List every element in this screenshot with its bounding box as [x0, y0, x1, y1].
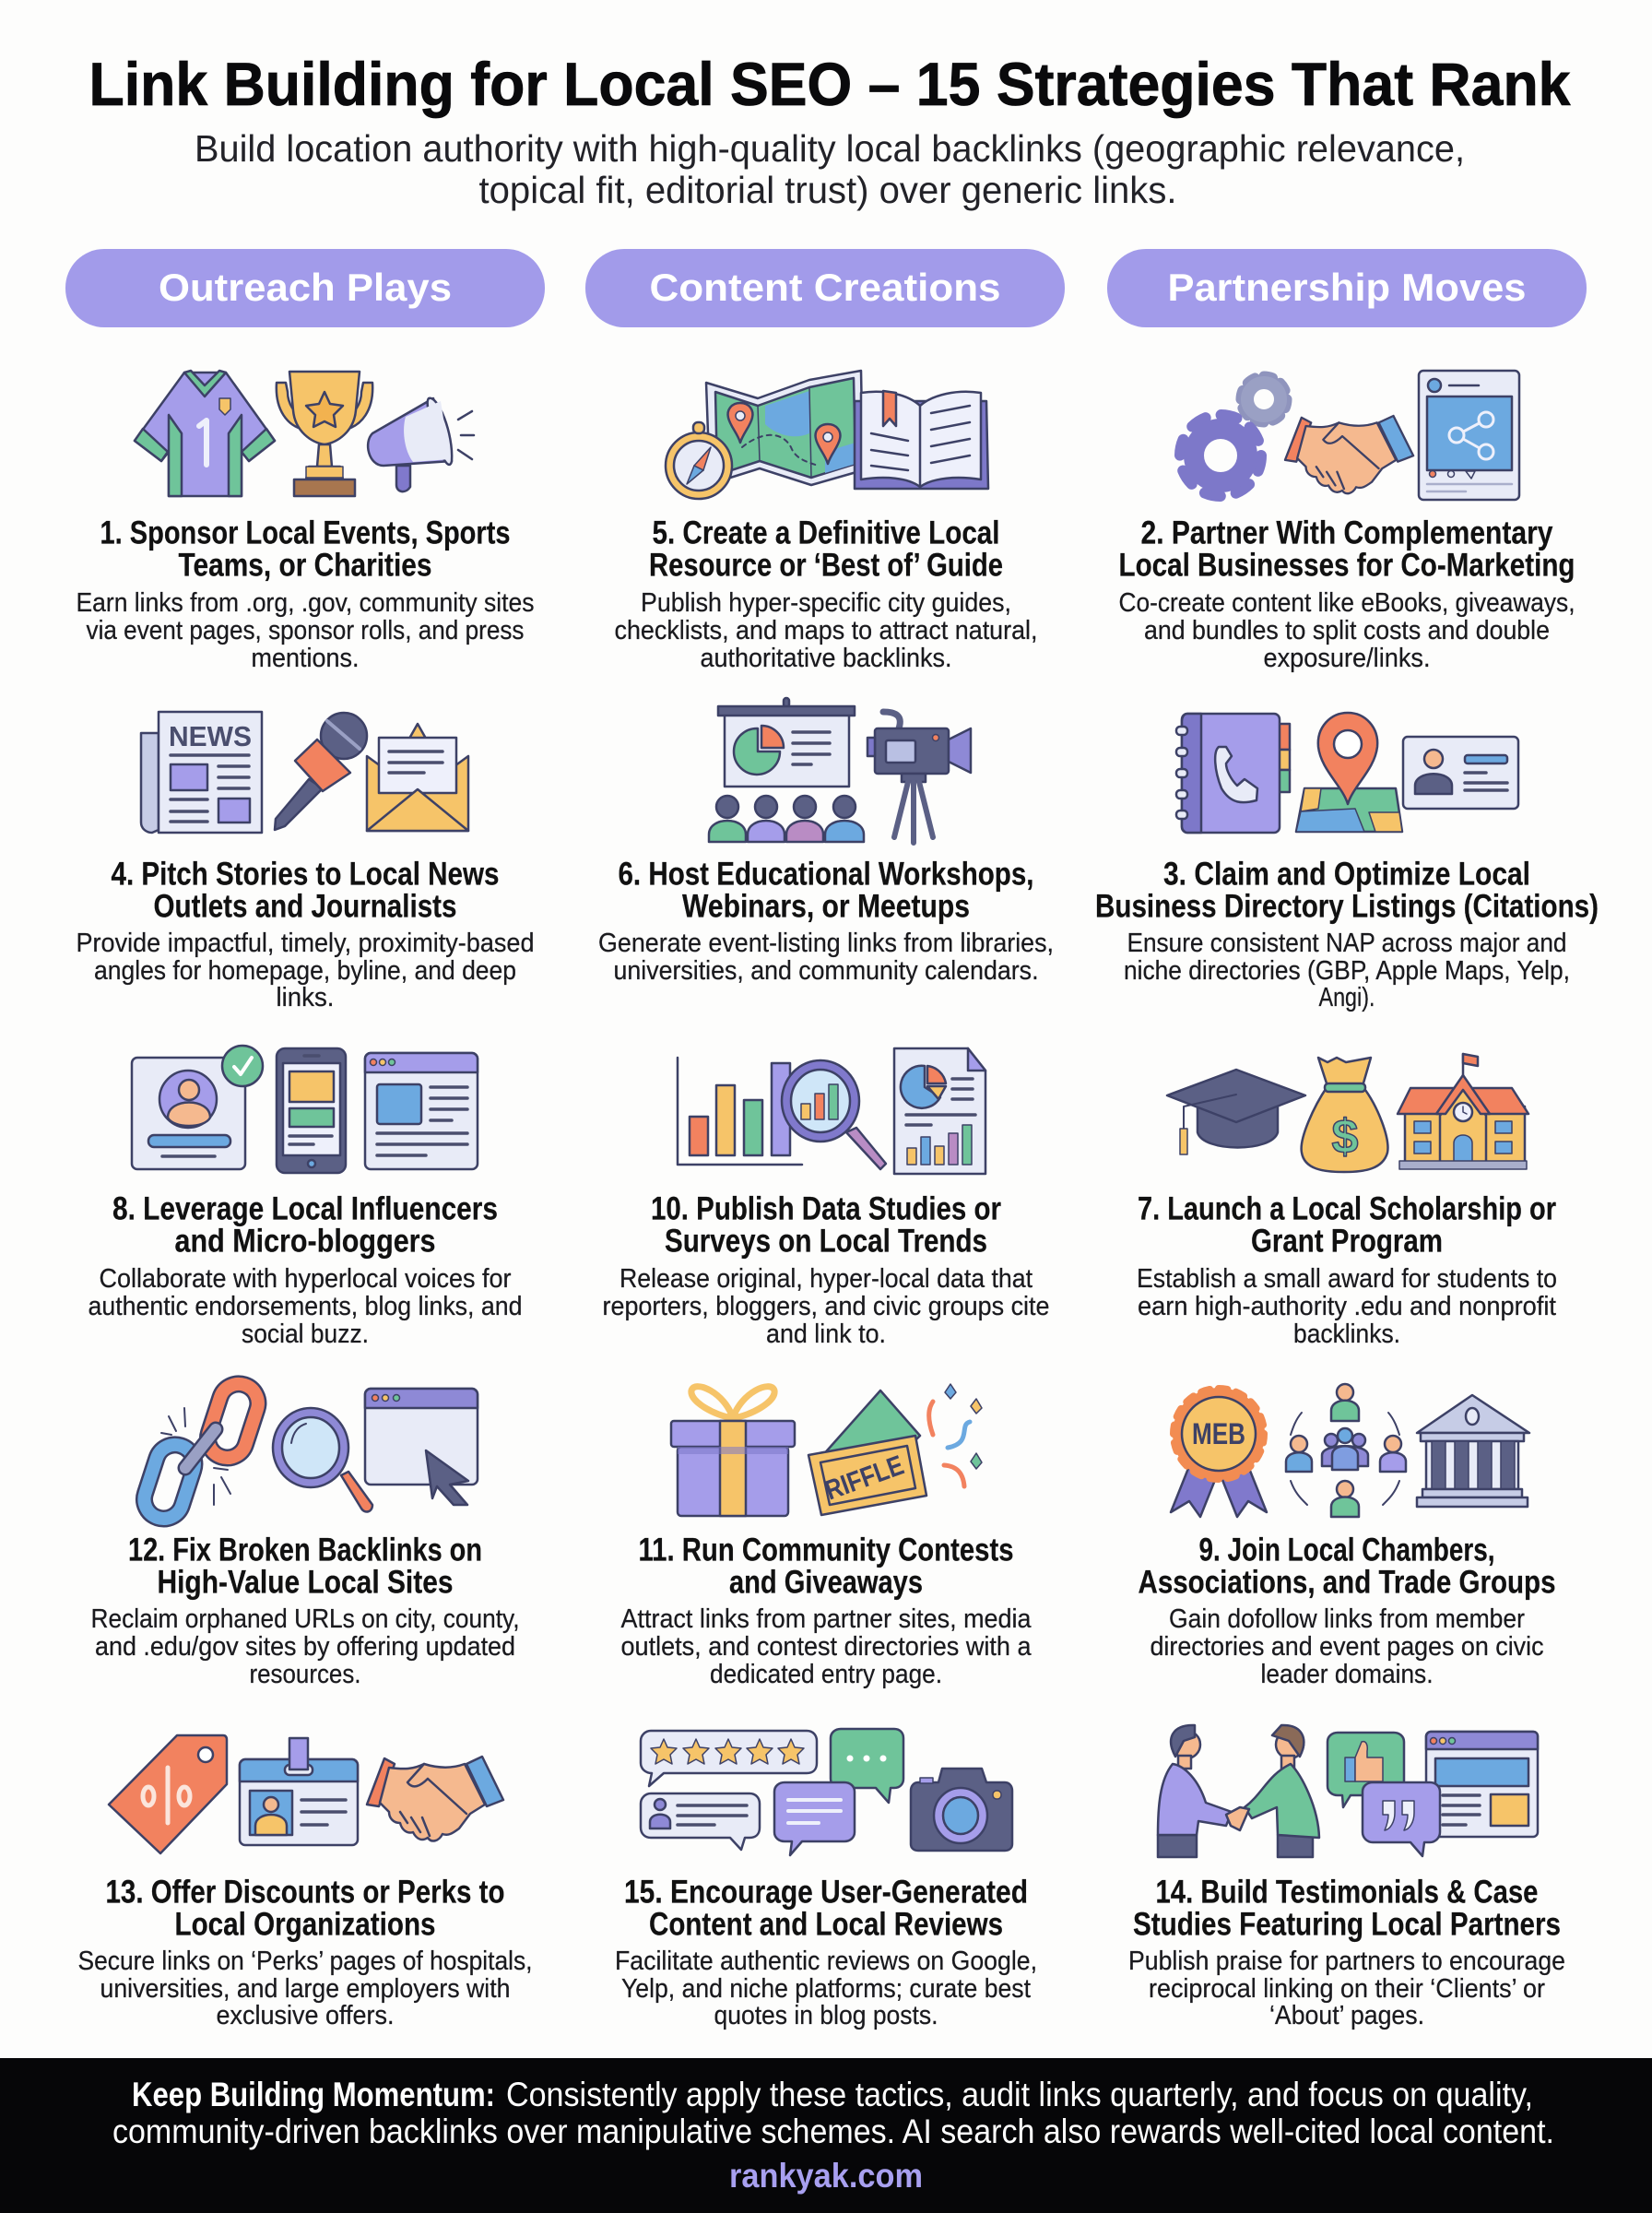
card 5: definitive local guide [614, 515, 1038, 673]
icon: reviews, speech bubbles, camera [641, 1729, 1012, 1855]
card 7: scholarship [1137, 1191, 1557, 1349]
heading: Grant Program [1251, 1223, 1443, 1260]
description: leader domains. [1261, 1660, 1433, 1689]
icon: presentation board, audience, video camera [709, 698, 971, 843]
title: Link Building for Local SEO – 15 Strategies That Rank [88, 50, 1571, 118]
icon: profile card, smartphone, browser window [132, 1046, 478, 1173]
description [615, 1947, 1037, 2030]
description: dedicated entry page. [710, 1660, 942, 1689]
description: angles for homepage, byline, and deep [94, 956, 516, 986]
column header: Partnership Moves [1107, 249, 1587, 327]
icon: medal, member network, bank building: MEB [1192, 1417, 1245, 1450]
card 2: partner with local businesses [1119, 515, 1575, 673]
description: ‘About’ pages. [1269, 2001, 1424, 2030]
description: Co-create content like eBooks, giveaways, [1119, 588, 1575, 618]
card 6: workshops [598, 856, 1054, 986]
footer message: Keep Building Momentum: [132, 2076, 495, 2113]
description: Facilitate authentic reviews on Google, [615, 1947, 1037, 1976]
heading: 4. Pitch Stories to Local News [111, 856, 500, 893]
heading: 12. Fix Broken Backlinks on [128, 1533, 482, 1568]
heading: 1. Sponsor Local Events, Sports [100, 515, 511, 551]
description: universities, and community calendars. [614, 956, 1038, 986]
icon: medal, member network, bank building [1171, 1384, 1529, 1517]
heading: 5. Create a Definitive Local [653, 515, 999, 551]
description: resources. [249, 1660, 361, 1689]
heading: 14. Build Testimonials & Case [1156, 1874, 1538, 1911]
description: checklists, and maps to attract natural, [614, 616, 1038, 645]
column header: Content Creations: Content Creations [649, 266, 1001, 309]
heading: Content and Local Reviews [649, 1907, 1003, 1942]
description: mentions. [251, 644, 360, 673]
description [90, 1604, 520, 1689]
heading: Teams, or Charities [179, 548, 431, 583]
description: reporters, bloggers, and civic groups cite [603, 1292, 1049, 1321]
description [76, 929, 535, 1012]
heading: Studies Featuring Local Partners [1133, 1907, 1561, 1942]
description: Angi). [1318, 983, 1375, 1012]
heading [1138, 1191, 1556, 1260]
heading: Webinars, or Meetups [682, 889, 970, 924]
column header: Content Creations [585, 249, 1065, 327]
heading: Associations, and Trade Groups [1138, 1564, 1556, 1601]
footer message [112, 2076, 1554, 2150]
description: Ensure consistent NAP across major and [1127, 929, 1567, 958]
subtitle: topical fit, editorial trust) over generic links. [479, 169, 1176, 211]
description: and bundles to split costs and double [1144, 616, 1550, 645]
description: Yelp, and niche platforms; curate best [621, 1974, 1031, 2004]
column header: Outreach Plays: Outreach Plays [159, 266, 452, 309]
description: niche directories (GBP, Apple Maps, Yelp, [1124, 956, 1570, 986]
icon: graduation cap, money bag, school [1167, 1054, 1528, 1172]
heading [100, 515, 511, 583]
heading: and Giveaways [729, 1564, 923, 1601]
icon: discount tag, ID badge, handshake [109, 1735, 503, 1853]
description [614, 588, 1038, 673]
heading [1095, 856, 1599, 924]
description [76, 588, 535, 673]
heading: 10. Publish Data Studies or [651, 1191, 1001, 1226]
description: Establish a small award for students to [1137, 1264, 1557, 1294]
icon: bar chart, magnifier, report [678, 1048, 985, 1174]
card 3: directory listings [1095, 856, 1599, 1012]
card 10: data studies [603, 1191, 1049, 1349]
description [88, 1264, 522, 1349]
description [621, 1604, 1032, 1689]
card 1: sponsor local events [76, 515, 535, 673]
heading: and Micro-bloggers [175, 1223, 435, 1260]
icon: gift, raffle tickets, confetti [671, 1384, 982, 1516]
description [1124, 929, 1570, 1012]
description: authoritative backlinks. [701, 644, 951, 673]
subtitle: Build location authority with high-quality local backlinks (geographic relevance, [195, 127, 1465, 170]
description: outlets, and contest directories with a [621, 1632, 1032, 1662]
card 4: pitch stories [76, 856, 535, 1012]
icon: broken chain, magnifier, browser with cursor [139, 1379, 478, 1523]
icon: newspaper, microphone, envelope [141, 712, 468, 833]
icon: jersey, trophy, megaphone [135, 371, 474, 496]
description: exclusive offers. [216, 2001, 395, 2030]
description: authentic endorsements, blog links, and [88, 1292, 522, 1321]
card 12: broken backlinks [90, 1533, 520, 1689]
description: Publish praise for partners to encourage [1128, 1947, 1565, 1976]
description: via event pages, sponsor rolls, and press [87, 616, 524, 645]
heading: 8. Leverage Local Influencers [112, 1191, 498, 1226]
card 9: chambers and associations [1138, 1533, 1556, 1689]
description [603, 1264, 1049, 1349]
description: exposure/links. [1263, 644, 1431, 673]
description: and link to. [766, 1320, 886, 1349]
heading: High-Value Local Sites [157, 1564, 454, 1601]
footer message: Consistently apply these tactics, audit links quarterly, and focus on quality, [506, 2076, 1533, 2113]
heading [128, 1533, 482, 1601]
column header: Partnership Moves: Partnership Moves [1167, 266, 1527, 309]
description [77, 1947, 533, 2030]
description: directories and event pages on civic [1150, 1632, 1543, 1662]
description [1119, 588, 1575, 673]
heading [624, 1874, 1028, 1942]
footer band [0, 2058, 1652, 2213]
heading [651, 1191, 1001, 1260]
heading: Local Businesses for Co-Marketing [1119, 548, 1575, 583]
description: and .edu/gov sites by offering updated [95, 1632, 515, 1662]
icon: newspaper, microphone, envelope: NEWS [169, 720, 252, 752]
heading [1133, 1874, 1561, 1942]
column header: Outreach Plays [65, 249, 545, 327]
card 15: user-generated content [615, 1874, 1037, 2030]
description: Publish hyper-specific city guides, [641, 588, 1011, 618]
subtitle [195, 127, 1465, 211]
icon: gears, handshake, social post [1180, 371, 1519, 500]
heading: Resource or ‘Best of’ Guide [649, 548, 1003, 583]
card 14: testimonials and case studies [1128, 1874, 1565, 2030]
heading [649, 515, 1003, 583]
description: Attract links from partner sites, media [621, 1604, 1032, 1634]
heading [111, 856, 500, 924]
heading: Surveys on Local Trends [665, 1223, 987, 1260]
card 11: contests and giveaways [621, 1533, 1032, 1689]
heading [638, 1533, 1014, 1601]
description: Provide impactful, timely, proximity-based [76, 929, 535, 958]
description: Earn links from .org, .gov, community sites [76, 588, 535, 618]
icon: two people shaking hands, thumbs up, quote, webpage [1158, 1725, 1538, 1857]
heading: 2. Partner With Complementary [1141, 515, 1553, 551]
description: universities, and large employers with [100, 1974, 511, 2004]
description [598, 929, 1054, 986]
heading: 9. Join Local Chambers, [1198, 1533, 1495, 1568]
heading: 7. Launch a Local Scholarship or [1138, 1191, 1556, 1226]
description: Generate event-listing links from libraries, [598, 929, 1054, 958]
heading [618, 856, 1034, 924]
footer message: community-driven backlinks over manipulative schemes. AI search also rewards well-cited local content. [112, 2112, 1554, 2150]
card 13: discounts and perks [77, 1874, 533, 2030]
icon: graduation cap, money bag, school: $ [1332, 1110, 1359, 1164]
heading [112, 1191, 498, 1260]
description: backlinks. [1293, 1320, 1400, 1349]
description: links. [277, 983, 334, 1012]
website link: rankyak.com [729, 2157, 923, 2195]
heading: 11. Run Community Contests [638, 1533, 1014, 1568]
description: quotes in blog posts. [714, 2001, 938, 2030]
heading: 3. Claim and Optimize Local [1163, 856, 1530, 893]
heading: Outlets and Journalists [153, 889, 457, 924]
description: social buzz. [242, 1320, 369, 1349]
description: Reclaim orphaned URLs on city, county, [90, 1604, 520, 1634]
description: Gain dofollow links from member [1169, 1604, 1525, 1634]
description: Release original, hyper-local data that [620, 1264, 1032, 1294]
heading: 13. Offer Discounts or Perks to [105, 1874, 505, 1911]
description [1150, 1604, 1543, 1689]
icon: gift, raffle tickets, confetti: RIFFLE [821, 1450, 908, 1507]
description: Secure links on ‘Perks’ pages of hospitals, [77, 1947, 533, 1976]
description: reciprocal linking on their ‘Clients’ or [1149, 1974, 1545, 2004]
heading: Local Organizations [175, 1907, 435, 1942]
icon: phone book, map pin, contact card [1176, 713, 1518, 833]
description [1128, 1947, 1565, 2030]
description: earn high-authority .edu and nonprofit [1138, 1292, 1556, 1321]
card 8: influencers [88, 1191, 522, 1349]
description [1137, 1264, 1557, 1349]
heading [1138, 1533, 1556, 1601]
heading [105, 1874, 505, 1942]
description: Collaborate with hyperlocal voices for [100, 1264, 512, 1294]
heading [1119, 515, 1575, 583]
heading: 6. Host Educational Workshops, [618, 856, 1034, 893]
icon: map, compass, book [666, 371, 988, 499]
heading: 15. Encourage User-Generated [624, 1874, 1028, 1911]
